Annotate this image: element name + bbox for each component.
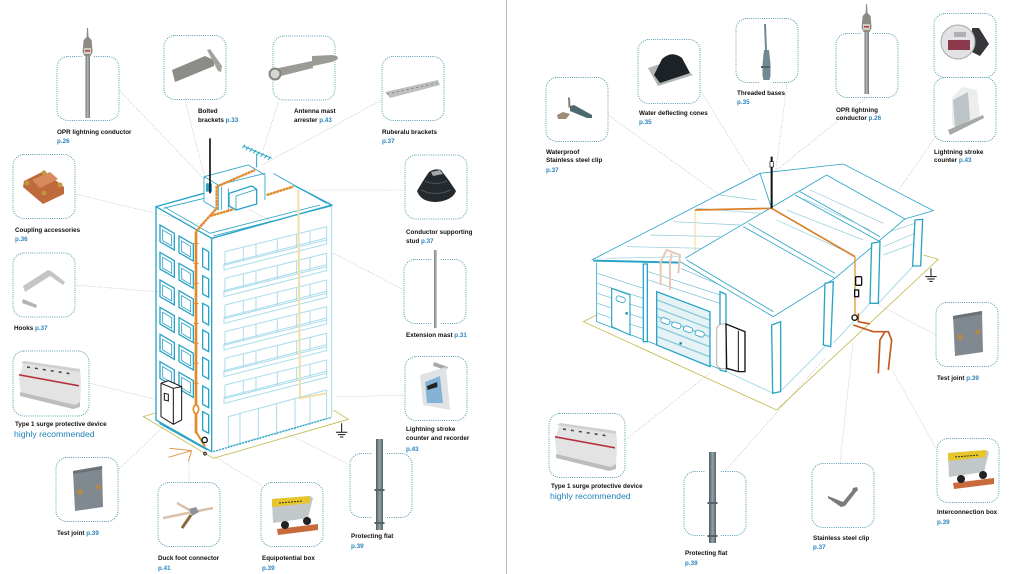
- panel: water deflecting cones: Water deflecting cones: [639, 110, 708, 117]
- panel: waterproof stainless steel clip: Stainless steel clip: [546, 157, 603, 164]
- panel: type 1 surge protective device (left): [13, 351, 107, 439]
- panel: test joint (right): Test joint p.39: [937, 375, 979, 382]
- panel: OPR lightning conductor (right): OPR lightning: [836, 107, 878, 114]
- panel: conductor supporting stud: Conductor supporting: [406, 229, 473, 236]
- panel: OPR lightning conductor: p.26: [57, 138, 70, 145]
- roof conductors: [695, 208, 892, 373]
- panel: antenna mast arrester: arrester p.43: [294, 117, 332, 124]
- panel: waterproof stainless steel clip: p.37: [546, 167, 559, 174]
- earthing duck foot: [168, 448, 192, 462]
- page divider: [506, 0, 507, 574]
- panel: protecting flat (right): Protecting flat: [685, 550, 728, 557]
- panel: type 1 surge protective device (right): [549, 414, 643, 501]
- panel: type 1 surge protective device (left): highly recommended: [14, 429, 95, 439]
- panel: OPR lightning conductor (right): conductor p.26: [836, 115, 882, 122]
- panel: antenna mast arrester: Antenna mast: [294, 108, 337, 115]
- illustration: industrial shed: [583, 157, 938, 410]
- rooftop plant room: [204, 165, 265, 210]
- panel: lightning stroke counter: Lightning stroke: [934, 149, 984, 156]
- lightning conductor mast: [770, 157, 773, 208]
- panel: OPR lightning conductor: [57, 28, 132, 145]
- panel: stainless steel clip: p.37: [813, 544, 826, 551]
- surge device cabinet: [717, 324, 745, 372]
- panel: ruberalu brackets: Ruberalu brackets: [382, 129, 437, 136]
- panel: protecting flat (left): p.39: [351, 543, 364, 550]
- panel: stainless steel clip: Stainless steel clip: [813, 535, 870, 542]
- panel: duck foot connector: p.41: [158, 565, 171, 572]
- panel: extension mast: [404, 250, 467, 339]
- panel: threaded bases: Threaded bases: [737, 90, 785, 97]
- panel: digital counter: [934, 14, 996, 78]
- illustration: office building: [143, 138, 348, 462]
- panel: protecting flat (left): Protecting flat: [351, 533, 394, 540]
- right building face: [212, 205, 332, 452]
- panel: OPR lightning conductor (right): [836, 4, 898, 122]
- panel: hooks: Hooks p.37: [14, 325, 48, 332]
- panel: antenna mast arrester: [270, 36, 338, 124]
- panel: test joint (left): [56, 458, 118, 537]
- panel: bolted brackets: Bolted: [198, 108, 218, 115]
- panel: interconnection box: p.39: [937, 519, 950, 526]
- panel: protecting flat (right): p.39: [685, 560, 698, 567]
- panel: equipotential box: [261, 482, 323, 572]
- panel: equipotential box: p.39: [262, 565, 275, 572]
- panel: water deflecting cones: [638, 40, 708, 126]
- panel: lightning stroke counter: [934, 78, 996, 164]
- panel: test joint (right): [936, 302, 998, 382]
- panel: waterproof stainless steel clip: Waterproof: [546, 149, 580, 156]
- panel: duck foot connector: Duck foot connector: [158, 555, 220, 562]
- panel: lightning stroke counter and recorder: counter and recorder: [406, 435, 470, 442]
- panel: protecting flat (right): [684, 451, 746, 567]
- panel: test joint (left): Test joint p.39: [57, 530, 99, 537]
- ground plate: [143, 410, 348, 458]
- test joint marker: [202, 437, 207, 455]
- columns: [643, 219, 923, 393]
- surge device cabinet: [161, 381, 182, 424]
- panel: interconnection box: [937, 438, 999, 526]
- panel: duck foot connector: [158, 482, 220, 572]
- leader lines: [75, 84, 940, 485]
- panel: ruberalu brackets: [382, 56, 444, 145]
- panel: threaded bases: p.35: [737, 99, 750, 106]
- panel: lightning stroke counter: counter p.43: [934, 157, 972, 164]
- lightning conductor mast: [207, 138, 212, 193]
- panel: ruberalu brackets: p.37: [382, 138, 395, 145]
- panel: bolted brackets: brackets p.33: [198, 117, 239, 124]
- panel: lightning stroke counter and recorder: Lightning stroke: [406, 426, 456, 433]
- panel: type 1 surge protective device (left): Type 1 surge protective device: [15, 421, 107, 428]
- roof: [592, 164, 933, 317]
- panel: protecting flat (left): [350, 438, 412, 550]
- counters and test joint on wall: [852, 277, 862, 320]
- panel: hooks: [13, 253, 75, 332]
- earth symbol: [336, 423, 347, 437]
- panel: lightning stroke counter and recorder: p.43: [406, 446, 419, 453]
- left building face with windows: [156, 207, 212, 452]
- panel: conductor supporting stud: [405, 155, 473, 245]
- down conductors: [193, 170, 327, 447]
- panel: bolted brackets: [164, 36, 239, 124]
- panel: interconnection box: Interconnection box: [937, 509, 998, 516]
- panel: type 1 surge protective device (right): highly recommended: [550, 491, 631, 501]
- panel: water deflecting cones: p.35: [639, 119, 652, 126]
- panel: type 1 surge protective device (right): Type 1 surge protective device: [551, 483, 643, 490]
- waterproof clip ghost: [661, 250, 680, 290]
- garage door: [657, 292, 710, 367]
- panel: stainless steel clip: [812, 464, 874, 551]
- shed facade and walls: [597, 223, 915, 393]
- panel: coupling accessories: p.36: [15, 236, 28, 243]
- panel: OPR lightning conductor: OPR lightning conductor: [57, 129, 132, 136]
- personnel door: [612, 288, 630, 335]
- panel: lightning stroke counter and recorder: [405, 356, 470, 453]
- panel: coupling accessories: [13, 154, 81, 243]
- panel: extension mast: Extension mast p.31: [406, 332, 467, 339]
- roof with parapet: [156, 173, 332, 238]
- earth symbol: [925, 268, 937, 281]
- panel: equipotential box: Equipotential box: [262, 555, 315, 562]
- panel: threaded bases: [736, 18, 798, 106]
- panel: conductor supporting stud: stud p.37: [406, 238, 434, 245]
- panel: coupling accessories: Coupling accessories: [15, 227, 81, 234]
- TV antenna: [242, 145, 272, 167]
- ground plate: [583, 255, 938, 410]
- panel: waterproof stainless steel clip: [546, 78, 608, 174]
